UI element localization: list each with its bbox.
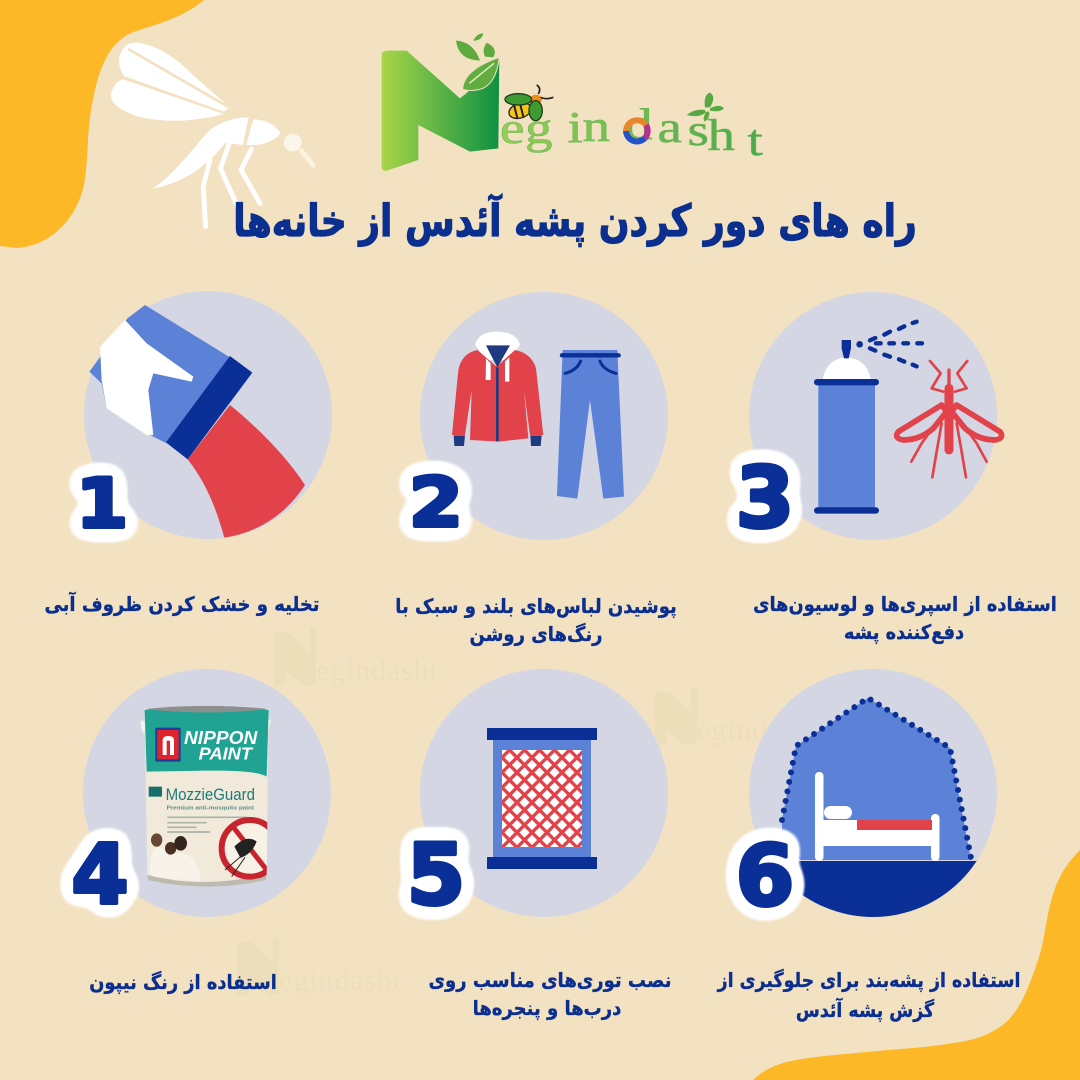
number 6: 6 (736, 827, 794, 925)
number 3: 3 (736, 449, 794, 547)
yellow blob: bottom right (753, 850, 1080, 1080)
brand text: NIPPON (184, 727, 258, 748)
body (153, 117, 249, 188)
caption: نصب توری‌های مناسب روی (429, 969, 671, 992)
logo swirl (626, 120, 648, 141)
watermark logos: egindasht (316, 654, 439, 687)
logo butterfly (687, 93, 724, 122)
panel 4: Nippon paint (71, 669, 331, 994)
caption: استفاده از اسپری‌ها و لوسیون‌های (753, 593, 1057, 616)
caption (395, 595, 677, 646)
number 1: 1 (76, 464, 128, 543)
caption: دفع‌کننده پشه (844, 621, 964, 644)
upper wing (119, 43, 230, 112)
logo bee (507, 100, 533, 121)
caption: گزش پشه آئدس (796, 997, 934, 1022)
icon: paint can: MozzieGuard (166, 785, 255, 804)
legs and proboscis (203, 144, 313, 227)
caption: استفاده از پشه‌بند برای جلوگیری از (717, 968, 1020, 992)
icon: spray can and mosquito (814, 322, 1002, 514)
yellow blob: top left (0, 0, 204, 248)
circle (420, 292, 668, 540)
panel 3: sprays and lotions (736, 292, 1057, 644)
number 2: 2 (409, 464, 463, 543)
panel 5: window screens (407, 669, 671, 1020)
icon: white mosquito (111, 43, 313, 227)
family (150, 847, 201, 882)
circle (749, 292, 997, 540)
panel 1: emptying water containers (44, 291, 332, 616)
logo: Negindasht (382, 33, 763, 171)
icon: paint can (141, 706, 278, 887)
watermark logos (237, 627, 820, 997)
logo leaves (463, 57, 499, 90)
panel 6: bed net (717, 669, 1020, 1022)
icon: paint brush and hand (89, 305, 305, 538)
circle (84, 291, 332, 539)
icon: window with mesh (487, 728, 597, 869)
no-mosquito sign (222, 820, 278, 877)
panel 2: long light clothing (395, 292, 677, 646)
icon: jacket and trousers (452, 332, 624, 499)
logo letter N (382, 51, 499, 171)
number 4: 4 (71, 828, 129, 923)
icon: bed under mosquito net (779, 696, 977, 917)
lower wing (111, 79, 224, 121)
watermark logos: egindasht (279, 964, 402, 997)
caption (753, 593, 1057, 644)
caption: استفاده از رنگ نیپون (89, 970, 277, 994)
circle (83, 669, 331, 917)
caption: تخلیه و خشک کردن ظروف آبی (44, 591, 320, 616)
circle (749, 669, 997, 917)
caption (717, 968, 1020, 1022)
nippon logo (155, 728, 181, 762)
caption (429, 969, 671, 1020)
caption: درب‌ها و پنجره‌ها (473, 997, 622, 1020)
title: راه های دور کردن پشه آئدس از خانه‌ها (233, 193, 917, 247)
caption: رنگ‌های روشن (470, 622, 602, 646)
icon: paint can: Premium anti-mosquito paint (167, 805, 254, 811)
logo wordmark: egindasht (500, 100, 763, 165)
watermark logos: egindasht (697, 714, 820, 747)
icon: paint can: PAINT (199, 743, 253, 763)
circle (420, 669, 668, 917)
number 5: 5 (407, 826, 465, 924)
caption: پوشیدن لباس‌های بلند و سبک با (395, 595, 677, 618)
